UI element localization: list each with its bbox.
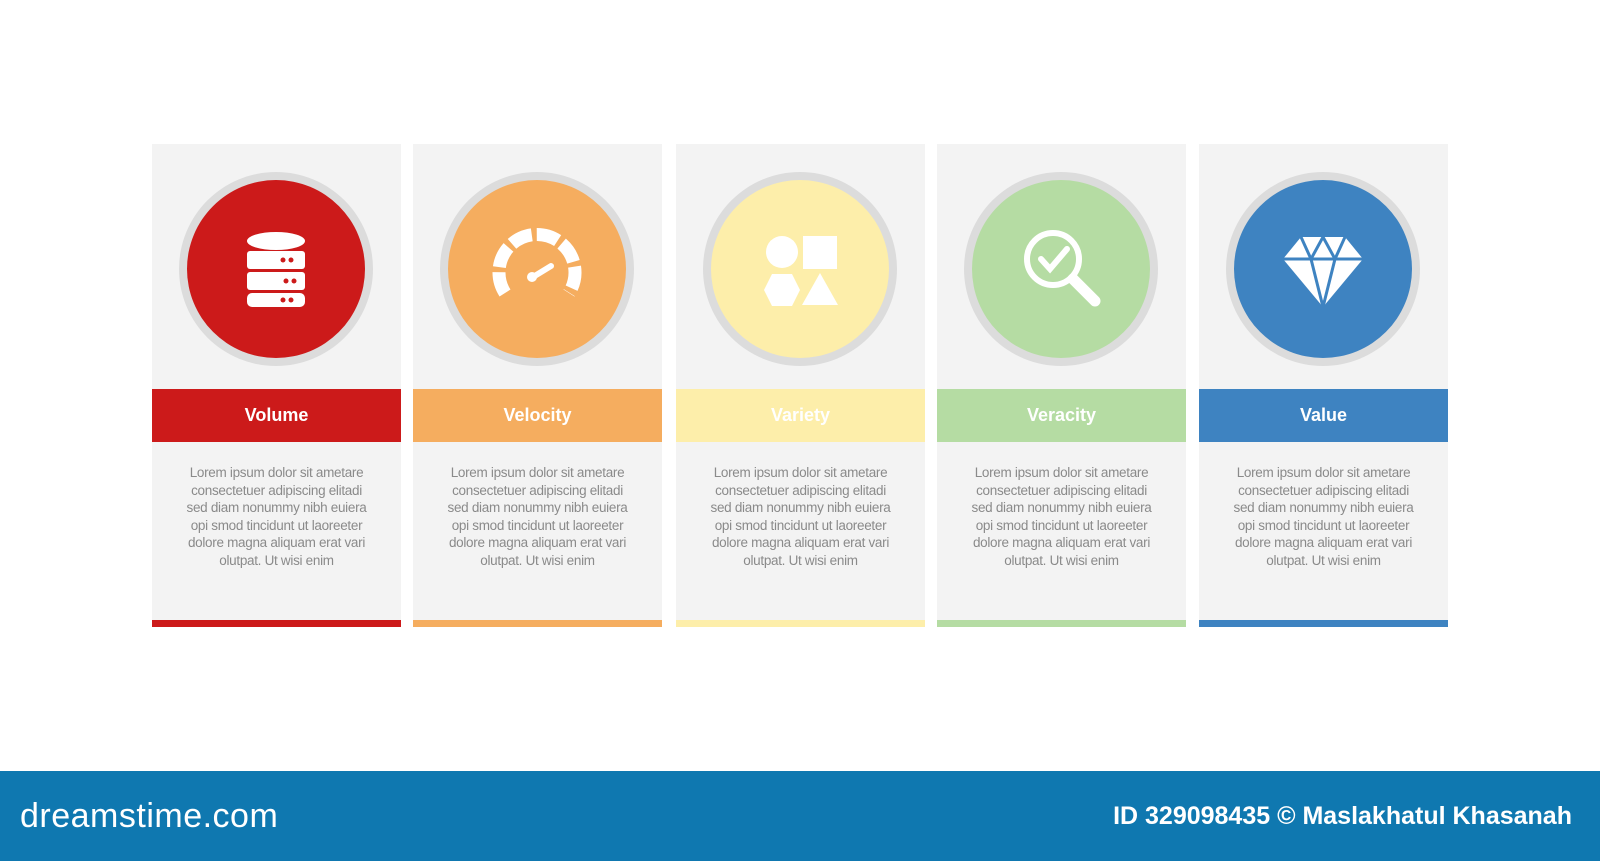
- heading: veracity: [937, 389, 1186, 442]
- text: value: dolore magna aliquam erat vari: [1235, 535, 1412, 550]
- text: velocity: sed diam nonummy nibh euiera: [448, 500, 627, 515]
- text: volume: dolore magna aliquam erat vari: [188, 535, 365, 550]
- text: veracity: [972, 465, 1152, 568]
- icon: database: [179, 172, 373, 366]
- icon: magnifier check: [964, 172, 1158, 366]
- text: veracity: dolore magna aliquam erat vari: [973, 535, 1150, 550]
- text: veracity: olutpat. Ut wisi enim: [1004, 553, 1119, 568]
- text: value: olutpat. Ut wisi enim: [1266, 553, 1381, 568]
- text: velocity: olutpat. Ut wisi enim: [480, 553, 595, 568]
- text: variety: Lorem ipsum dolor sit ametare: [714, 465, 887, 480]
- text: velocity: Lorem ipsum dolor sit ametare: [451, 465, 624, 480]
- heading: value: [1199, 389, 1448, 442]
- heading: volume: [152, 389, 401, 442]
- panel: value: [1199, 144, 1448, 627]
- panel: variety: [676, 144, 925, 627]
- text: velocity: opi smod tincidunt ut laoreeter: [452, 518, 623, 533]
- text: veracity: opi smod tincidunt ut laoreeter: [976, 518, 1147, 533]
- text: variety: consectetuer adipiscing elitadi: [715, 483, 886, 498]
- text: variety: dolore magna aliquam erat vari: [712, 535, 889, 550]
- panel: veracity: [937, 144, 1186, 627]
- text: volume: consectetuer adipiscing elitadi: [191, 483, 362, 498]
- text: velocity: dolore magna aliquam erat vari: [449, 535, 626, 550]
- text: value: [1234, 465, 1414, 568]
- heading: variety: Variety: [771, 405, 830, 425]
- text: value: sed diam nonummy nibh euiera: [1234, 500, 1413, 515]
- text: volume: [186, 465, 367, 568]
- text: velocity: consectetuer adipiscing elitadi: [452, 483, 623, 498]
- text: veracity: Lorem ipsum dolor sit ametare: [975, 465, 1148, 480]
- heading: velocity: [413, 389, 662, 442]
- text: value: consectetuer adipiscing elitadi: [1238, 483, 1409, 498]
- text: veracity: sed diam nonummy nibh euiera: [972, 500, 1151, 515]
- text: volume: sed diam nonummy nibh euiera: [187, 500, 366, 515]
- heading: veracity: Veracity: [1027, 405, 1096, 425]
- text: variety: [710, 465, 891, 568]
- panel: velocity: [413, 144, 662, 627]
- icon: speedometer: [440, 172, 634, 366]
- text: volume: olutpat. Ut wisi enim: [219, 553, 334, 568]
- footer logo: dreamstime.com: [20, 797, 278, 835]
- icon: diamond: [1226, 172, 1420, 366]
- footer bar: [0, 771, 1600, 861]
- icon: shapes: [703, 172, 897, 366]
- heading: value: Value: [1300, 405, 1347, 425]
- text: value: Lorem ipsum dolor sit ametare: [1237, 465, 1410, 480]
- text: velocity: [448, 465, 628, 568]
- text: variety: sed diam nonummy nibh euiera: [711, 500, 890, 515]
- text: variety: opi smod tincidunt ut laoreeter: [715, 518, 886, 533]
- heading: velocity: Velocity: [503, 405, 572, 425]
- text: volume: opi smod tincidunt ut laoreeter: [191, 518, 362, 533]
- text: variety: olutpat. Ut wisi enim: [743, 553, 858, 568]
- text: volume: Lorem ipsum dolor sit ametare: [190, 465, 363, 480]
- panel: volume: [152, 144, 401, 627]
- heading: variety: [676, 389, 925, 442]
- heading: volume: Volume: [245, 405, 308, 425]
- footer credit: ID 329098435 © Maslakhatul Khasanah: [1113, 802, 1572, 830]
- text: veracity: consectetuer adipiscing elitadi: [976, 483, 1147, 498]
- text: value: opi smod tincidunt ut laoreeter: [1238, 518, 1409, 533]
